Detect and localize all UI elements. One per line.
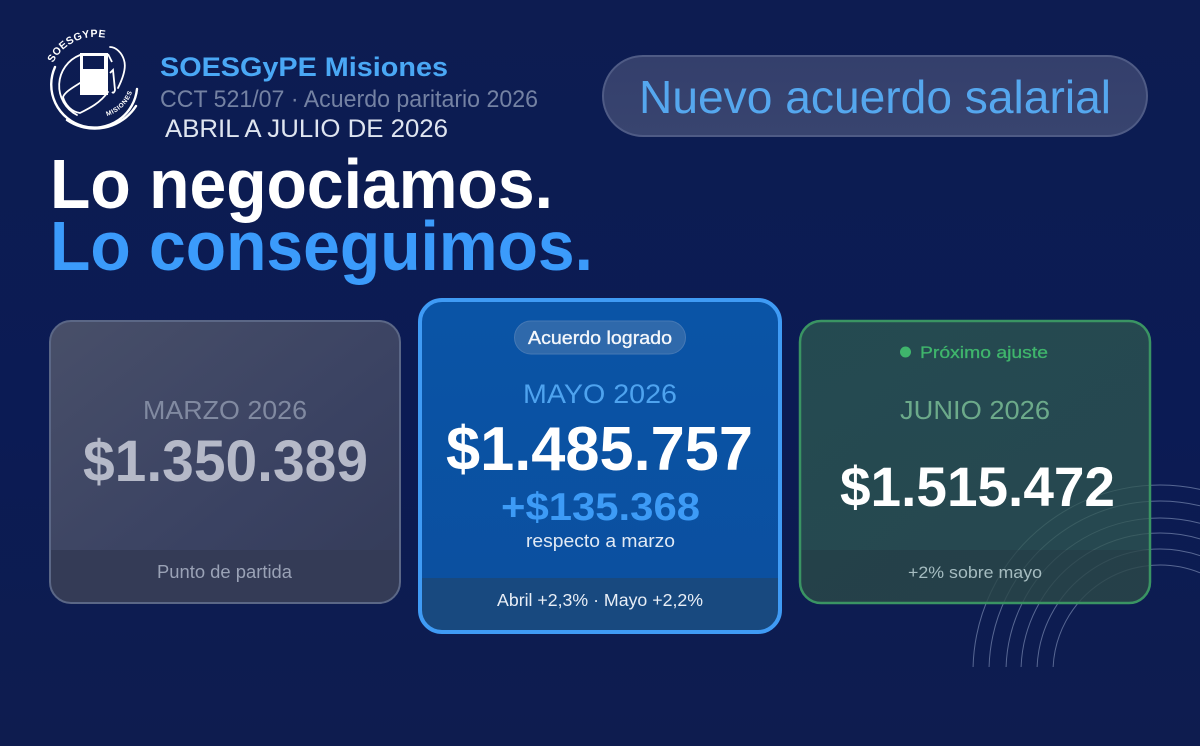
subheading: agreement: CCT 521/07 · Acuerdo paritario 2026	[160, 86, 538, 113]
panel: mayo 2026: respecto a marzo	[526, 531, 675, 551]
subheading: period: ABRIL A JULIO DE 2026	[165, 115, 448, 143]
panel: marzo 2026	[50, 321, 400, 604]
title	[50, 145, 593, 285]
panel: junio 2026	[800, 321, 1150, 604]
panel: marzo 2026: MARZO 2026	[143, 395, 307, 425]
panel: junio 2026: +2% sobre mayo	[908, 563, 1042, 582]
badge: Próximo ajuste: Próximo ajuste	[920, 343, 1048, 362]
pill: Nuevo acuerdo salarial	[603, 56, 1147, 136]
decorative concentric arcs	[973, 485, 1200, 667]
title: Lo negociamos.	[50, 145, 553, 223]
panel: mayo 2026: $1.485.757	[446, 415, 753, 484]
panel: junio 2026: JUNIO 2026	[900, 395, 1050, 425]
badge: Acuerdo logrado	[514, 321, 686, 354]
panel: mayo 2026: MAYO 2026	[523, 379, 677, 409]
logo: SOESGyPE Misiones: MISIONES	[106, 91, 132, 116]
logo: SOESGyPE Misiones: SOESGYPE	[48, 30, 106, 62]
panel: junio 2026: $1.515.472	[840, 455, 1115, 518]
panel: mayo 2026: +$135.368	[501, 486, 700, 529]
pill: Nuevo acuerdo salarial: Nuevo acuerdo salarial	[639, 71, 1111, 123]
panel: marzo 2026: $1.350.389	[83, 429, 368, 494]
panel: mayo 2026	[420, 300, 780, 634]
title: Lo conseguimos.	[50, 207, 593, 285]
panel: mayo 2026: Abril +2,3% · Mayo +2,2%	[497, 590, 703, 610]
heading: organisation: SOESGyPE Misiones	[160, 52, 448, 82]
panel: marzo 2026: Punto de partida	[157, 562, 293, 582]
badge: Acuerdo logrado: Acuerdo logrado	[528, 328, 672, 348]
logo: SOESGyPE Misiones	[48, 30, 138, 130]
